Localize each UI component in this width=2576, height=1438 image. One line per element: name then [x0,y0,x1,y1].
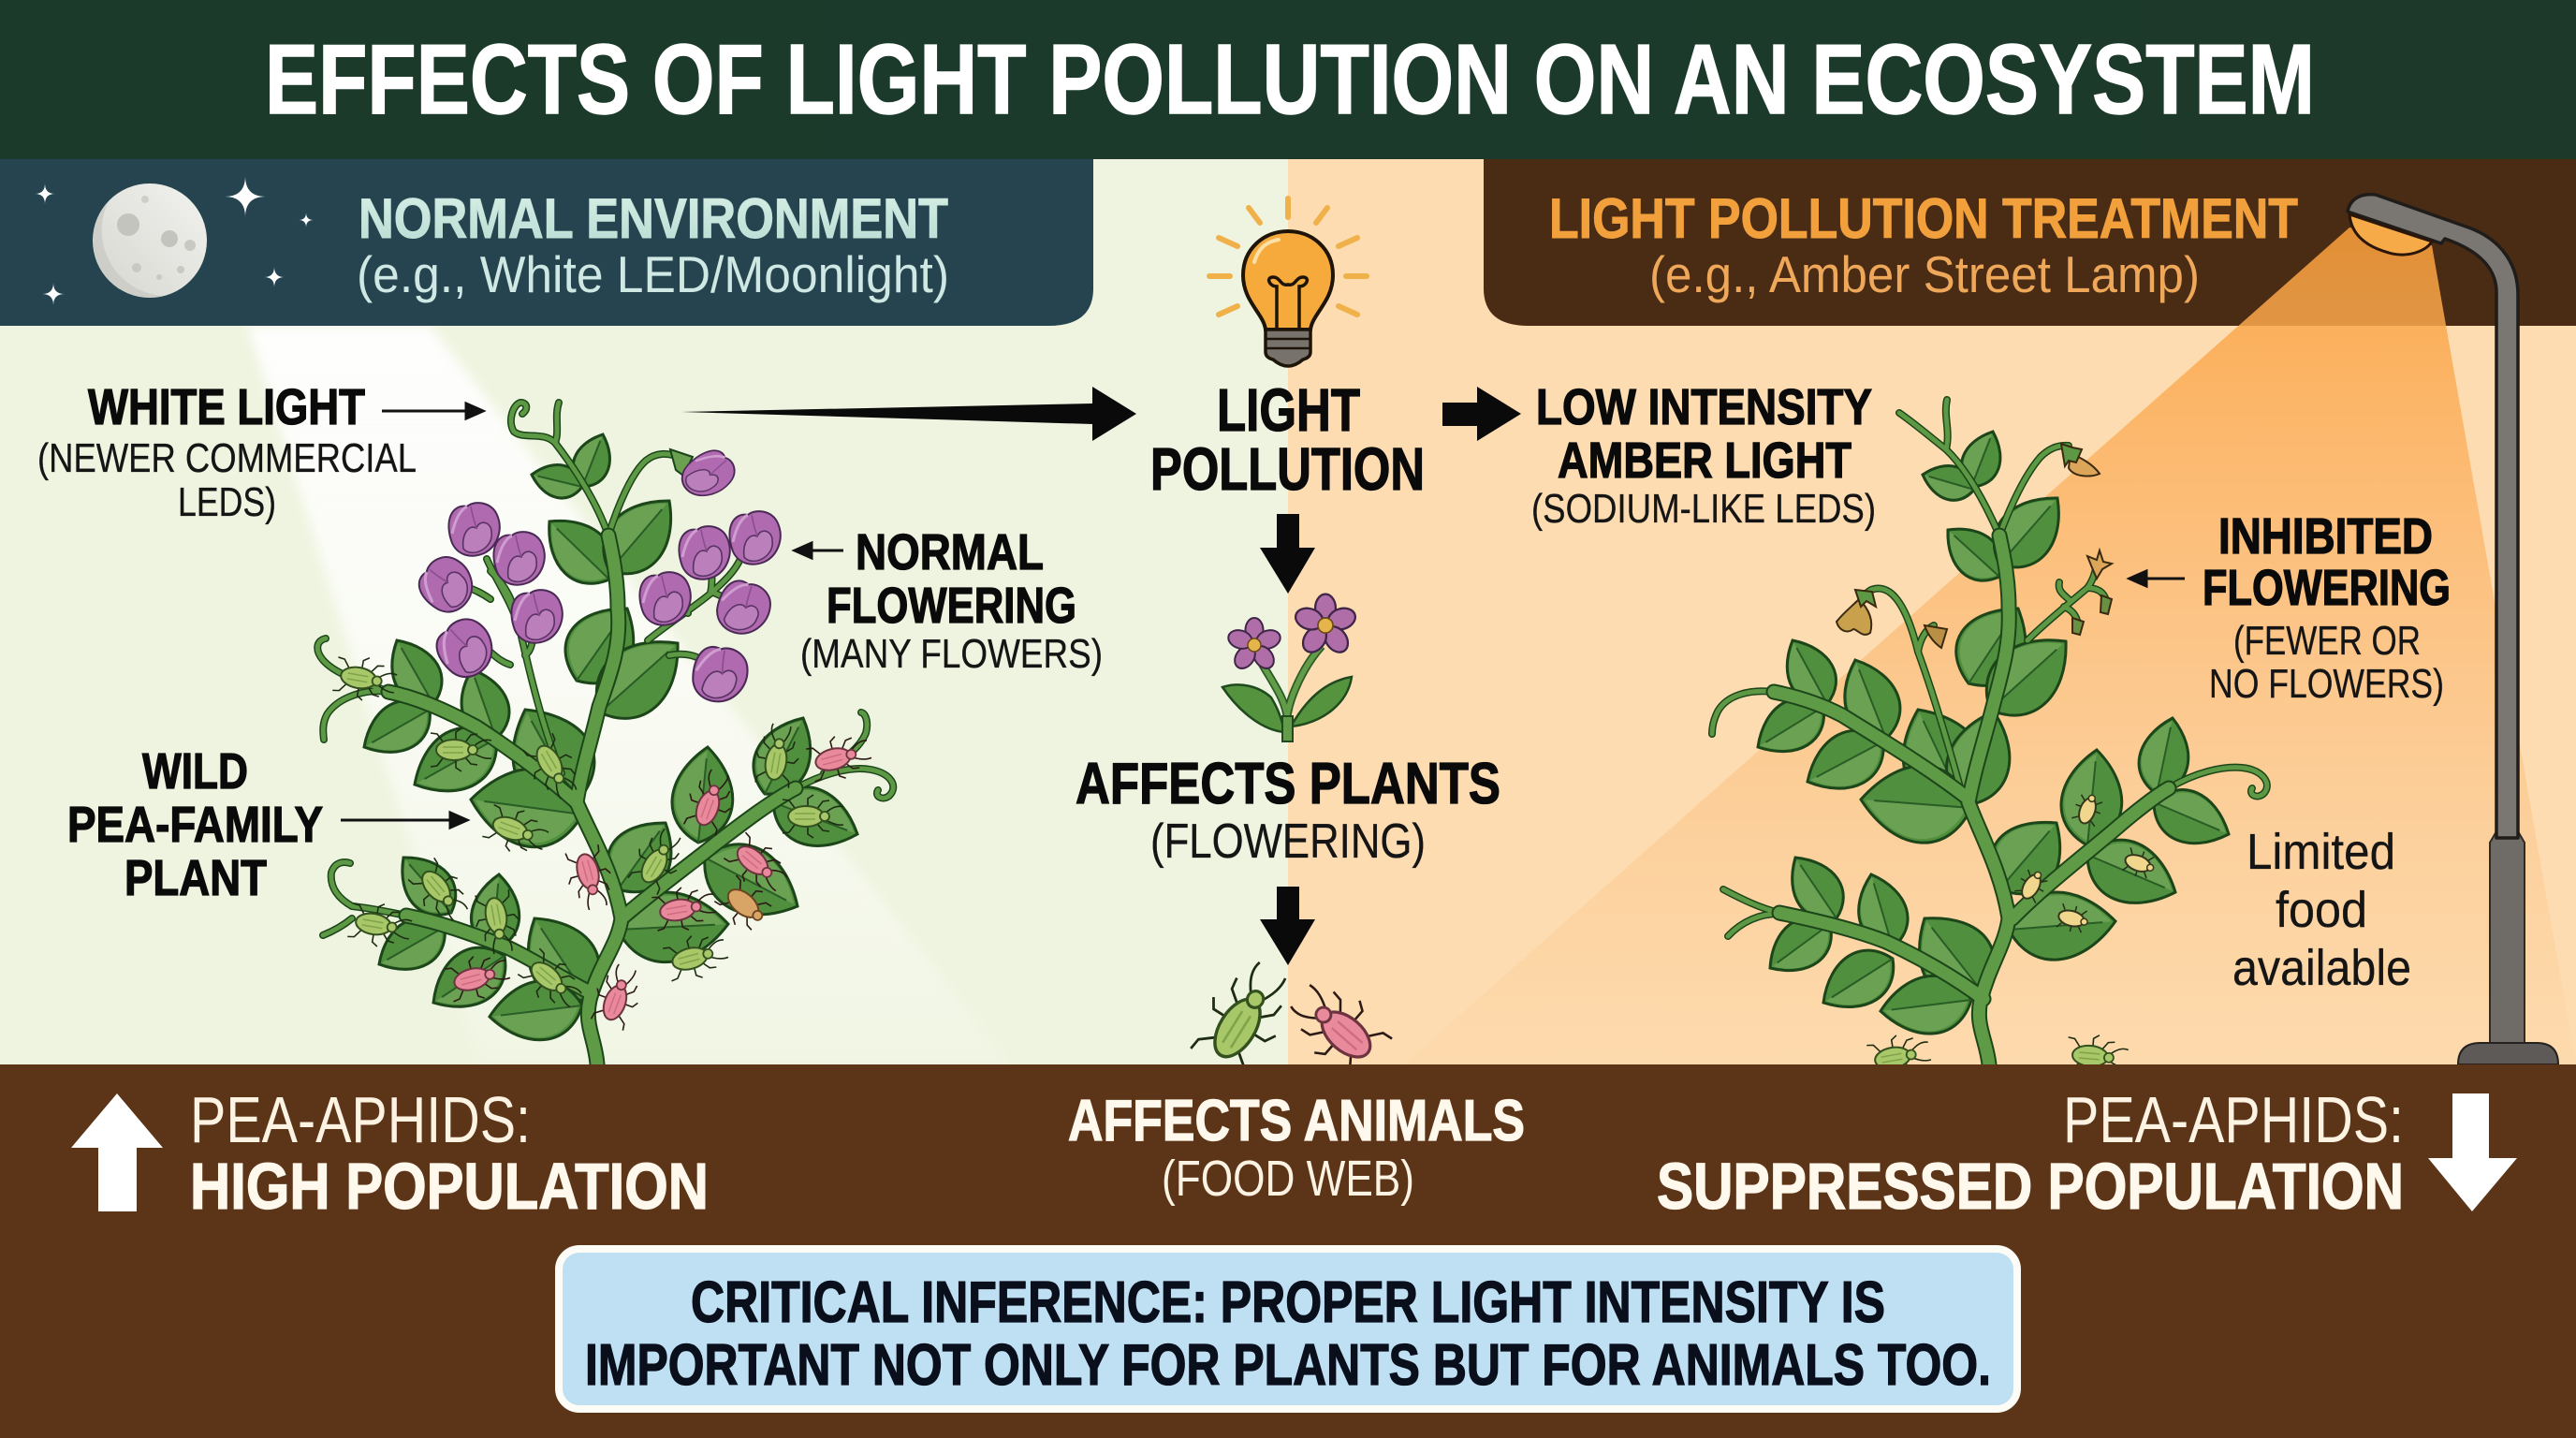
icon: down arrow [2428,1093,2517,1211]
left plant flowers [410,443,781,710]
callout: critical inference: IMPORTANT NOT ONLY FOR PLANTS BUT FOR ANIMALS TOO. [585,1333,1991,1398]
label: inhibited flowering [2203,508,2451,707]
heading: affects plants: (FLOWERING) [1150,814,1426,869]
left plant: normal flowering with many aphids [317,403,893,1064]
left plant aphids [331,653,875,1032]
heading: normal environment: NORMAL ENVIRONMENT [359,187,948,250]
label: normal flowering: NORMAL [856,524,1044,580]
text: affects animals: AFFECTS ANIMALS [1068,1089,1525,1153]
heading: affects plants [1076,752,1500,869]
label: wild pea-family plant [67,743,323,906]
icon: up arrow [71,1093,163,1211]
label: inhibited flowering: (FEWER OR [2233,618,2421,664]
panel: bottom band [0,1064,2576,1438]
arrow: to inhibited flowers [2130,571,2185,586]
arrow: white light to light pollution [681,387,1136,441]
text: high population [190,1083,709,1223]
label: limited food available [2232,824,2411,996]
lamp post base [2490,831,2525,1043]
arrow: light pollution to plants [1260,514,1315,594]
left plant stems [317,403,893,1064]
icon: light bulb [1209,198,1367,366]
left plant leaves [352,428,868,1046]
label: inhibited flowering: NO FLOWERS) [2209,661,2444,707]
label: low intensity amber light: LOW INTENSITY [1536,379,1872,435]
icon: central aphids [1190,961,1393,1064]
label: normal flowering: (MANY FLOWERS) [800,631,1103,677]
heading: light pollution treatment: LIGHT POLLUTION TREATMENT [1549,187,2298,250]
lamp base plate [2458,1043,2558,1064]
icon: flowering plant [1222,594,1358,741]
right plant stems [1712,400,2267,1064]
wilted flowers and buds [1837,444,2112,648]
heading: light pollution [1150,376,1425,503]
label: limited food available: food [2276,882,2367,938]
label: wild pea-family plant: PLANT [124,850,267,906]
label: white light: LEDS) [178,479,276,525]
heading: light pollution: LIGHT [1217,376,1360,444]
right plant leaves [1745,425,2239,1040]
title banner [0,0,2576,159]
white light beam [248,326,910,959]
arrow: plants to animals [1260,887,1315,965]
label: normal flowering [800,524,1103,677]
icon: full moon [93,183,207,298]
heading: light pollution: POLLUTION [1150,435,1425,503]
arrow: white light to plant [382,404,483,418]
callout: critical inference [559,1249,2017,1409]
panel: normal environment header [0,159,1093,326]
label: wild pea-family plant: PEA-FAMILY [67,797,323,853]
label: white light [37,379,417,525]
right plant aphids [1866,791,2158,1083]
label: low intensity amber light: AMBER LIGHT [1558,433,1852,489]
label: white light: (NEWER COMMERCIAL [37,435,417,481]
text: high population: PEA-APHIDS: [190,1083,531,1156]
text: affects animals: (FOOD WEB) [1162,1151,1414,1207]
panel: light pollution treatment header [1484,159,2576,326]
label: wild pea-family plant: WILD [142,743,248,800]
text: suppressed population: PEA-APHIDS: [2063,1083,2404,1156]
scene background: cool left half [0,159,1288,1064]
arrow: light pollution to amber light [1442,387,1521,441]
icon: stars [35,176,314,305]
label: inhibited flowering: INHIBITED [2218,508,2433,565]
arrow: to wild plant [341,813,467,828]
icon: street lamp [2348,195,2558,1064]
label: limited food available: available [2232,940,2411,996]
right plant: inhibited flowering with few aphids [1712,400,2267,1083]
callout: critical inference: CRITICAL INFERENCE: PROPER LIGHT INTENSITY IS [691,1270,1885,1335]
lamp bulb [2349,214,2432,255]
label: normal flowering: FLOWERING [827,578,1076,634]
text: affects animals [1068,1089,1525,1207]
text: suppressed population [1657,1083,2404,1223]
subheading: amber street lamp: (e.g., Amber Street Lamp) [1649,245,2200,303]
text: suppressed population: SUPPRESSED POPULATION [1657,1150,2404,1223]
arrow: to flowers [795,543,843,558]
heading: affects plants: AFFECTS PLANTS [1076,752,1500,816]
label: low intensity amber light [1531,379,1876,532]
lamp pole and head [2348,195,2518,838]
label: limited food available: Limited [2247,824,2395,880]
amber light beam [1477,227,2565,1000]
scene background: warm right half [1288,159,2576,1064]
label: inhibited flowering: FLOWERING [2203,560,2451,616]
label: low intensity amber light: (SODIUM-LIKE LEDS) [1531,486,1876,532]
label: white light: WHITE LIGHT [88,379,365,435]
text: high population: HIGH POPULATION [190,1150,709,1223]
subheading: white LED/moonlight: (e.g., White LED/Moonlight) [357,245,949,303]
